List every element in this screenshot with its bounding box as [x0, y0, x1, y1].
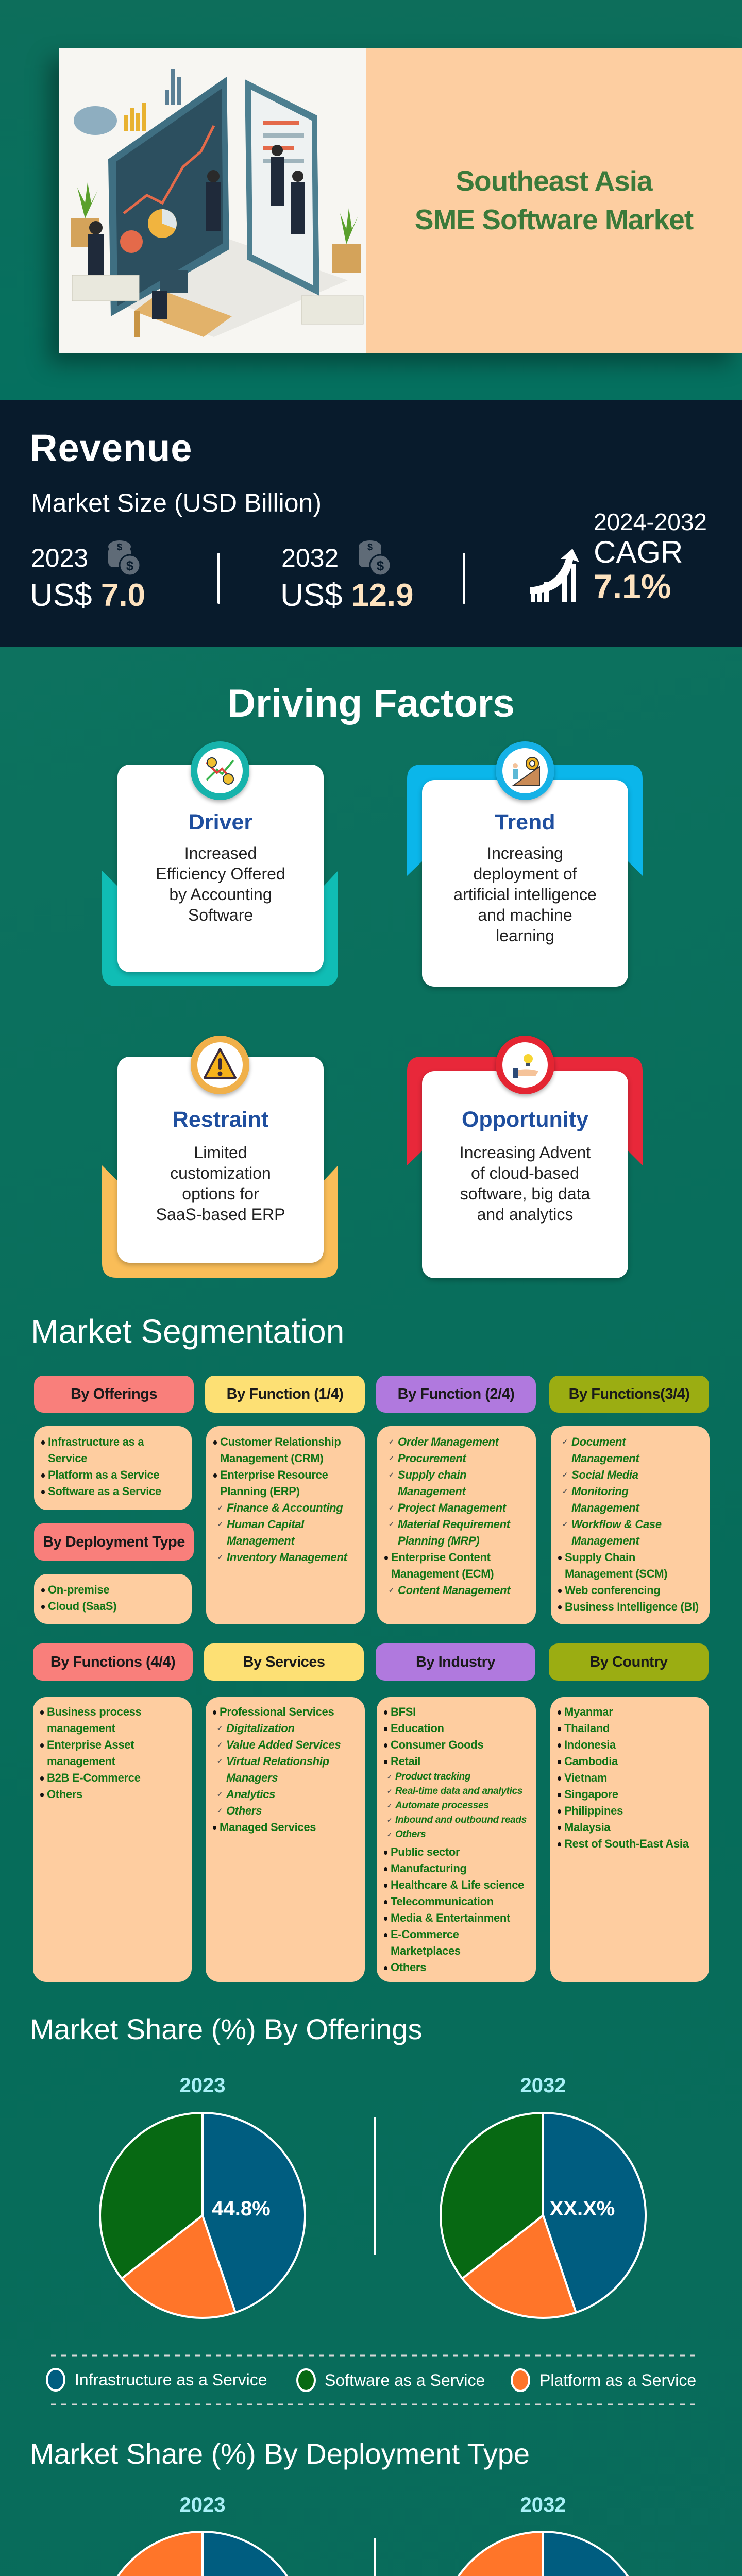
list: function 2: Planning (MRP) [398, 1534, 479, 1547]
divider [217, 553, 220, 604]
list: services: Managers [226, 1771, 278, 1784]
list: services: Virtual Relationship [226, 1755, 329, 1768]
list: function 4: Others [47, 1788, 82, 1801]
pie 2032: XX.X% [550, 2197, 615, 2220]
illustration: business analytics [59, 48, 366, 353]
icon: coins [108, 540, 139, 575]
icon: coins: $ [377, 558, 384, 573]
list: function 2: Project Management [398, 1501, 506, 1514]
list: industry: Education [391, 1722, 444, 1735]
panel: driver: Software [188, 906, 253, 924]
panel: opportunity: Opportunity [462, 1107, 588, 1132]
list: industry: Automate processes [395, 1800, 489, 1811]
icon: coins: $ [367, 542, 373, 552]
header: industry [376, 1643, 535, 1681]
list: function 1: Management (CRM) [220, 1452, 324, 1465]
list: function 4: B2B E-Commerce [47, 1771, 141, 1784]
header: services [204, 1643, 364, 1681]
list: country: Indonesia [564, 1738, 616, 1751]
header: function 2 [376, 1376, 536, 1413]
panel: driver [102, 741, 338, 986]
list: industry: Public sector [391, 1845, 460, 1858]
list: industry: Consumer Goods [391, 1738, 483, 1751]
panel: restraint: customization [170, 1164, 271, 1182]
header: function 4 [33, 1643, 193, 1681]
icon: opportunity [496, 1036, 554, 1094]
list: function 1: Customer Relationship [220, 1435, 341, 1448]
list: function 3: Supply Chain [565, 1551, 635, 1564]
panel: trend: artificial intelligence [453, 885, 597, 904]
list: function 2: Supply chain [398, 1468, 466, 1481]
heading: market share by deployment: Market Share (%) By Deployment Type [30, 2437, 530, 2470]
list: function 3: Business Intelligence (BI) [565, 1600, 699, 1613]
pie 2032 [441, 2494, 646, 2576]
list: offerings: Service [48, 1452, 87, 1465]
chart: deployment pies [116, 2494, 629, 2576]
list: function 2 [377, 1426, 536, 1624]
list: industry: Others [391, 1961, 426, 1974]
list: function 1: Human Capital [227, 1518, 304, 1531]
stat: CAGR: 7.1% [594, 567, 671, 605]
list: function 3: Monitoring [571, 1485, 629, 1498]
list: function 3: Management (SCM) [565, 1567, 667, 1580]
list: industry: Telecommunication [391, 1895, 494, 1908]
list: deployment: On-premise [48, 1583, 109, 1596]
divider [463, 553, 465, 604]
icon: driver [191, 741, 249, 800]
list: industry: Healthcare & Life science [391, 1878, 524, 1891]
list: country: Rest of South-East Asia [564, 1837, 689, 1850]
header: function 4: By Functions (4/4) [50, 1654, 175, 1670]
pie 2032: 2032 [520, 2074, 566, 2097]
panel: restraint: options for [182, 1184, 259, 1203]
header: industry: By Industry [416, 1654, 495, 1670]
header: country: By Country [589, 1654, 668, 1670]
stat: 2032 [280, 540, 414, 613]
heading: market segmentation: Market Segmentation [31, 1313, 344, 1350]
header: country [549, 1643, 709, 1681]
list: function 1: Enterprise Resource [220, 1468, 328, 1481]
list: country: Cambodia [564, 1755, 618, 1768]
panel: trend: deployment of [473, 865, 577, 883]
panel: restraint: SaaS-based ERP [156, 1205, 285, 1224]
list: industry: Real-time data and analytics [395, 1786, 522, 1797]
list: country: Singapore [564, 1788, 618, 1801]
header: function 3: By Functions(3/4) [569, 1386, 689, 1402]
header: offerings [34, 1376, 194, 1413]
header: function 3 [549, 1376, 709, 1413]
pie 2032: 2032 [520, 2494, 566, 2516]
panel: restraint [102, 1036, 338, 1278]
panel: opportunity: software, big data [460, 1184, 590, 1203]
pie 2023 [100, 2494, 305, 2576]
list: function 3: Social Media [571, 1468, 638, 1481]
list: services: Others [226, 1804, 262, 1817]
pie 2023: 2023 [180, 2074, 225, 2097]
legend: offerings [47, 2369, 696, 2391]
legend: offerings: Software as a Service [325, 2371, 485, 2389]
panel: opportunity: of cloud-based [471, 1164, 579, 1182]
stat: 2023: 2023 [31, 544, 88, 572]
list: services [206, 1697, 365, 1982]
list: industry: Media & Entertainment [391, 1911, 510, 1924]
title panel [366, 48, 742, 353]
title [415, 165, 694, 235]
header: deployment type: By Deployment Type [43, 1533, 185, 1550]
header: offerings: By Offerings [71, 1386, 157, 1402]
panel: restraint: Restraint [173, 1107, 268, 1132]
panel: trend: learning [496, 926, 554, 945]
list: offerings: Infrastructure as a [48, 1435, 144, 1448]
list: offerings: Platform as a Service [48, 1468, 159, 1481]
list: country: Myanmar [564, 1705, 613, 1718]
header: function 1 [205, 1376, 365, 1413]
list: country: Philippines [564, 1804, 623, 1817]
heading: revenue: Revenue [30, 427, 192, 469]
list: services: Digitalization [226, 1722, 295, 1735]
panel: driver: Driver [189, 810, 252, 835]
stat: CAGR [530, 509, 707, 605]
panel: driver: by Accounting [169, 885, 272, 904]
list: industry: Product tracking [395, 1771, 470, 1782]
list: function 3: Web conferencing [565, 1584, 661, 1597]
panel: opportunity [407, 1036, 643, 1282]
hero banner [59, 48, 742, 353]
panel: trend: Increasing [487, 844, 563, 862]
list: function 4: management [47, 1755, 115, 1768]
list: industry: Others [395, 1829, 426, 1840]
list: services: Professional Services [220, 1705, 334, 1718]
list: function 2: Material Requirement [398, 1518, 510, 1531]
list: country: Thailand [564, 1722, 610, 1735]
pie 2023 [100, 2074, 305, 2318]
heading: driving factors: Driving Factors [227, 682, 515, 725]
pie 2023: 44.8% [212, 2197, 271, 2220]
list: services: Analytics [226, 1788, 275, 1801]
list: industry [377, 1697, 536, 1982]
pie 2032 [441, 2074, 646, 2318]
stat: 2032: 2032 [281, 544, 339, 572]
list: function 1: Inventory Management [227, 1551, 347, 1564]
list: country: Malaysia [564, 1821, 610, 1834]
pie 2023: 2023 [180, 2494, 225, 2516]
panel: driver: Increased [184, 844, 257, 862]
list: function 2: Order Management [398, 1435, 499, 1448]
list: industry: Manufacturing [391, 1862, 467, 1875]
list: function 2: Management (ECM) [391, 1567, 494, 1580]
header: function 2: By Function (2/4) [398, 1386, 514, 1402]
icon: warning [191, 1036, 249, 1094]
icon: coins [359, 540, 390, 575]
header: deployment type [34, 1523, 194, 1561]
stat: 2023: US$ 7.0 [30, 578, 145, 613]
list: function 3: Management [571, 1452, 639, 1465]
panel: trend [407, 741, 643, 990]
list: function 2: Enterprise Content [391, 1551, 491, 1564]
list: offerings: Software as a Service [48, 1485, 161, 1498]
icon: coins: $ [117, 542, 122, 552]
list: industry: Marketplaces [391, 1944, 461, 1957]
list: function 1: Planning (ERP) [220, 1485, 300, 1498]
chart: offerings pies [46, 2074, 696, 2405]
header: function 1: By Function (1/4) [227, 1386, 343, 1402]
stat: CAGR: CAGR [594, 535, 683, 569]
list: offerings [34, 1426, 192, 1510]
stat: CAGR: 2024-2032 [594, 509, 707, 535]
list: function 3 [551, 1426, 710, 1624]
icon: growth arrow [530, 549, 579, 602]
list: function 3: Document [571, 1435, 626, 1448]
list: function 4 [33, 1697, 192, 1982]
icon: coins: $ [126, 558, 134, 573]
list: function 1: Finance & Accounting [227, 1501, 343, 1514]
list: deployment [34, 1574, 192, 1624]
list: country: Vietnam [564, 1771, 607, 1784]
list: deployment: Cloud (SaaS) [48, 1600, 116, 1613]
heading: market share by offerings: Market Share (%) By Offerings [30, 2013, 422, 2045]
list: function 1 [206, 1426, 365, 1624]
title: Southeast Asia [456, 165, 652, 197]
panel: restraint: Limited [194, 1143, 247, 1162]
legend: offerings: Platform as a Service [539, 2371, 696, 2389]
list: function 2: Content Management [398, 1584, 510, 1597]
list: function 4: Business process [47, 1705, 142, 1718]
panel: trend: and machine [478, 906, 572, 924]
panel: opportunity: and analytics [477, 1205, 573, 1224]
list: services: Managed Services [220, 1821, 316, 1834]
panel: opportunity: Increasing Advent [460, 1143, 591, 1162]
list: country [550, 1697, 709, 1982]
list: industry: Retail [391, 1755, 420, 1768]
list: function 3: Management [571, 1534, 639, 1547]
list: function 2: Management [398, 1485, 465, 1498]
stat: 2023 [30, 540, 145, 613]
panel: trend: Trend [495, 810, 555, 835]
list: industry: E-Commerce [391, 1928, 459, 1941]
list: function 4: Enterprise Asset [47, 1738, 134, 1751]
list: industry: Inbound and outbound reads [395, 1815, 527, 1825]
list: function 1: Management [227, 1534, 294, 1547]
list: function 3: Management [571, 1501, 639, 1514]
header: services: By Services [243, 1654, 325, 1670]
list: services: Value Added Services [226, 1738, 341, 1751]
list: function 4: management [47, 1722, 115, 1735]
list: function 2: Procurement [398, 1452, 466, 1465]
background: top green [0, 0, 742, 400]
list: function 3: Workflow & Case [571, 1518, 662, 1531]
legend: offerings: Infrastructure as a Service [75, 2370, 267, 2389]
icon: trend [496, 741, 554, 800]
revenue section [0, 400, 742, 647]
subheading: market size: Market Size (USD Billion) [31, 488, 322, 517]
background: main green [0, 647, 742, 2576]
list: industry: BFSI [391, 1705, 416, 1718]
title: SME Software Market [415, 204, 693, 235]
panel: driver: Efficiency Offered [156, 865, 285, 883]
stat: 2032: US$ 12.9 [280, 578, 414, 613]
